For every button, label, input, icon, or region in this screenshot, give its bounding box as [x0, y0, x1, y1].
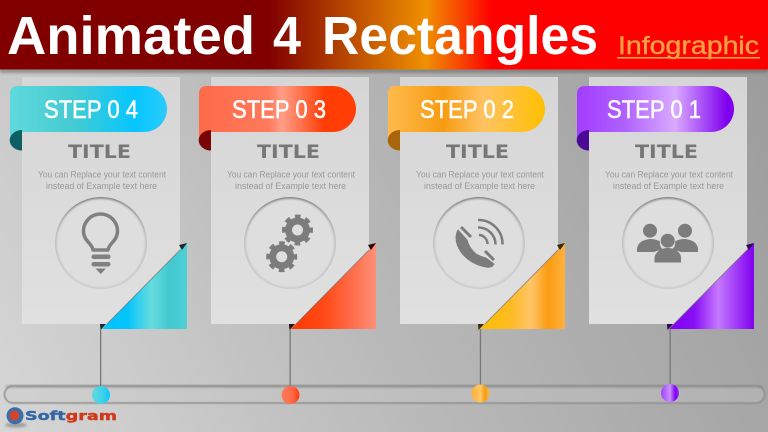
title: TITLE	[446, 141, 509, 163]
inset circle	[622, 197, 714, 289]
body text	[38, 170, 166, 191]
ribbon fold	[199, 130, 211, 150]
connector line	[670, 329, 671, 385]
ribbon fold	[577, 130, 589, 150]
timeline dot	[472, 384, 490, 402]
panel: step 03	[199, 77, 376, 404]
connector line	[480, 329, 481, 385]
card	[589, 77, 747, 324]
ribbon	[199, 86, 356, 140]
folded corner	[100, 243, 187, 330]
title: TITLE	[635, 141, 698, 163]
card	[400, 77, 558, 324]
panel: step 01	[577, 77, 754, 402]
step label: STEP 0 2	[420, 96, 514, 124]
body text	[416, 170, 544, 191]
title: TITLE	[68, 141, 131, 163]
panel: step 04	[10, 77, 187, 404]
title: TITLE	[257, 141, 320, 163]
step label: STEP 0 4	[44, 96, 138, 124]
header banner	[0, 0, 768, 73]
body text: You can Replace your text content	[416, 170, 544, 180]
body text: instead of Example text here	[46, 181, 157, 191]
connector line	[290, 329, 291, 386]
inset circle	[244, 197, 336, 289]
ribbon	[388, 86, 545, 140]
icon: light bulb	[84, 214, 118, 274]
body text: You can Replace your text content	[227, 170, 355, 180]
timeline dot	[92, 386, 110, 404]
inset circle	[55, 197, 147, 289]
step label: STEP 0 3	[232, 96, 326, 124]
panel: step 02	[388, 77, 565, 402]
inset circle	[433, 197, 525, 289]
icon: people	[637, 224, 698, 262]
title: Rectangles	[322, 6, 598, 66]
icon: gears	[268, 216, 311, 270]
step label: STEP 0 1	[607, 96, 701, 124]
ribbon fold	[388, 130, 400, 150]
body text: You can Replace your text content	[38, 170, 166, 180]
timeline dot	[661, 384, 679, 402]
ribbon	[10, 86, 167, 140]
card	[211, 77, 369, 324]
title	[7, 6, 598, 66]
logo: Softgram: Soft gram	[25, 409, 117, 423]
icon: phone	[456, 220, 503, 267]
body text	[227, 170, 355, 191]
body text: You can Replace your text content	[605, 170, 733, 180]
folded corner	[478, 243, 565, 330]
body text: instead of Example text here	[235, 181, 346, 191]
timeline dot	[282, 386, 300, 404]
card	[22, 77, 180, 324]
connector line	[100, 329, 101, 386]
body text: instead of Example text here	[613, 181, 724, 191]
logo: Softgram	[5, 407, 117, 428]
title: Animated	[7, 6, 255, 66]
ribbon	[577, 86, 734, 140]
title: 4	[273, 6, 301, 66]
body text	[605, 170, 733, 191]
folded corner	[289, 243, 376, 330]
ribbon fold	[10, 130, 22, 150]
subtitle: Infographic: Infographic	[618, 32, 759, 60]
timeline track	[4, 384, 764, 403]
folded corner	[667, 243, 754, 330]
body text: instead of Example text here	[424, 181, 535, 191]
